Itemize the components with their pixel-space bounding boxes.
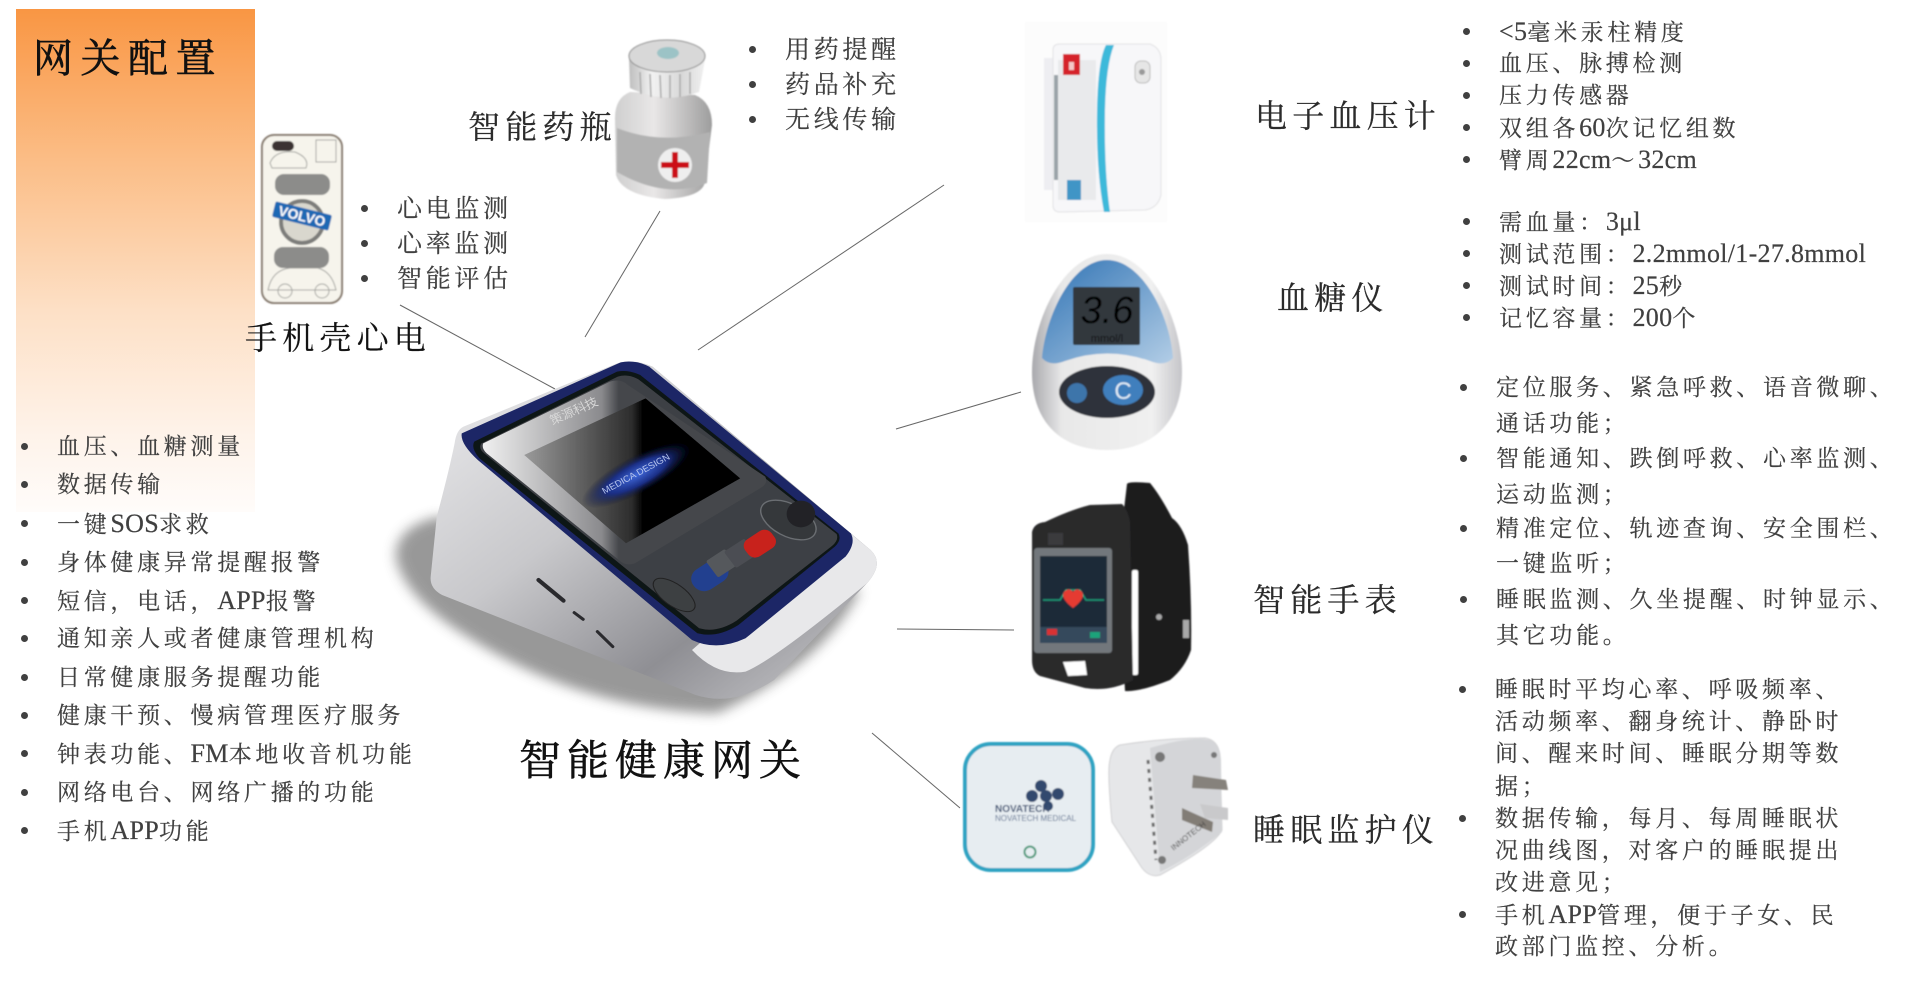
list: gateway configuration: 短信，电话，APP报警 <box>57 586 319 615</box>
list: smart watch features: 运动监测； <box>1496 482 1630 507</box>
heading: phone case ECG: 手机壳心电 <box>245 320 431 356</box>
icon: smart health gateway device: 策源科技 <box>547 394 600 427</box>
list: gateway configuration: 网络电台、网络广播的功能 <box>57 780 377 805</box>
list: sleep monitor features <box>1459 677 1842 959</box>
list: blood pressure specs: 臂周22cm～32cm <box>1499 145 1697 174</box>
list: blood pressure specs: 双组各60次记忆组数 <box>1499 113 1739 142</box>
list: sleep monitor features: 睡眠时平均心率、呼吸频率、 <box>1495 677 1842 702</box>
list: gateway configuration: 一键SOS求救 <box>57 509 212 538</box>
list: sleep monitor features: 活动频率、翻身统计、静卧时 <box>1495 709 1842 734</box>
icon: smart watch <box>1032 482 1191 691</box>
list: sleep monitor features: 数据传输，每月、每周睡眠状 <box>1495 806 1842 831</box>
list: smart watch features: 一键监听； <box>1496 551 1630 576</box>
list: pill bottle features: 药品补充 <box>785 72 900 99</box>
list: gateway configuration: 钟表功能、FM本地收音机功能 <box>57 739 416 768</box>
list: gateway configuration: 血压、血糖测量 <box>57 434 244 459</box>
list: gateway configuration: 日常健康服务提醒功能 <box>57 665 324 690</box>
icon: smart health gateway device: MEDICA DESIGN <box>600 452 672 496</box>
list: gateway configuration: 数据传输 <box>57 472 164 497</box>
icon: phone case ECG <box>262 135 342 303</box>
list: glucose meter specs: 测试范围：2.2mmol/1-27.8mmol <box>1499 239 1866 268</box>
list: sleep monitor features: 改进意见； <box>1495 870 1628 895</box>
icon: glucose meter: C <box>1114 378 1132 405</box>
icon: sleep monitor front <box>965 744 1093 870</box>
list: sleep monitor features: 况曲线图，对客户的睡眠提出 <box>1495 838 1842 863</box>
heading: glucose meter: 血糖仪 <box>1277 280 1389 316</box>
heading: sleep monitor: 睡眠监护仪 <box>1253 812 1439 848</box>
icon: sleep monitor front: NOVATECH <box>995 804 1050 815</box>
list: phone case features: 心率监测 <box>397 231 512 258</box>
list: smart watch features: 睡眠监测、久坐提醒、时钟显示、 <box>1496 587 1896 612</box>
list: glucose meter specs: 测试时间：25秒 <box>1499 271 1686 300</box>
list: sleep monitor features: 据； <box>1495 774 1548 799</box>
heading: blood pressure monitor: 电子血压计 <box>1255 98 1441 134</box>
list: smart watch features: 定位服务、紧急呼救、语音微聊、 <box>1496 375 1896 400</box>
list: blood pressure specs: 压力传感器 <box>1499 83 1632 108</box>
list: smart watch features: 其它功能。 <box>1496 623 1630 648</box>
list: blood pressure specs: 血压、脉搏检测 <box>1499 51 1686 76</box>
list: sleep monitor features: 手机APP管理，便于子女、民 <box>1495 900 1837 929</box>
icon: glucose meter <box>1032 254 1182 450</box>
heading: smart watch: 智能手表 <box>1253 582 1402 618</box>
list: sleep monitor features: 政部门监控、分析。 <box>1495 934 1735 959</box>
list: pill bottle features: 用药提醒 <box>785 37 900 64</box>
list: smart watch features: 智能通知、跌倒呼救、心率监测、 <box>1496 446 1896 471</box>
icon: glucose meter: mmol/l <box>1091 333 1123 345</box>
list: phone case features: 心电监测 <box>397 196 512 223</box>
list: gateway configuration: 身体健康异常提醒报警 <box>57 550 324 575</box>
icon: blood pressure monitor <box>1025 22 1167 222</box>
icon: smart pill bottle <box>615 40 712 199</box>
list: gateway configuration: 健康干预、慢病管理医疗服务 <box>57 703 404 728</box>
list: phone case features: 智能评估 <box>397 266 512 293</box>
heading: smart pill bottle: 智能药瓶 <box>468 109 617 145</box>
list: blood pressure specs <box>1463 17 1739 174</box>
icon: sleep monitor plug: INNOTECH <box>1169 819 1208 852</box>
list: gateway configuration: 手机APP功能 <box>57 816 212 845</box>
list: gateway configuration <box>21 434 416 845</box>
icon: smart health gateway device <box>396 361 877 713</box>
list: glucose meter specs <box>1463 207 1866 332</box>
icon: phone case ECG: VOLVO <box>277 202 327 230</box>
list: gateway configuration: 通知亲人或者健康管理机构 <box>57 626 377 651</box>
list: smart watch features: 精准定位、轨迹查询、安全围栏、 <box>1496 516 1896 541</box>
list: smart watch features <box>1460 375 1896 648</box>
title: 网关配置 <box>33 36 223 81</box>
list: pill bottle features: 无线传输 <box>785 107 900 134</box>
icon: glucose meter: 3.6 <box>1081 290 1134 332</box>
list: glucose meter specs: 记忆容量：200个 <box>1499 303 1699 332</box>
list: phone case features <box>361 196 512 293</box>
connector lines <box>400 185 1021 808</box>
panel: orange gradient header <box>16 9 255 512</box>
list: pill bottle features <box>749 36 900 134</box>
list: glucose meter specs: 需血量：3μl <box>1499 207 1641 236</box>
list: sleep monitor features: 间、醒来时间、睡眠分期等数 <box>1495 741 1842 766</box>
icon: sleep monitor plug <box>1109 738 1228 876</box>
list: blood pressure specs: <5毫米汞柱精度 <box>1499 17 1687 46</box>
heading: smart health gateway: 智能健康网关 <box>519 739 807 785</box>
icon: sleep monitor front: NOVATECH MEDICAL <box>995 814 1077 823</box>
list: smart watch features: 通话功能； <box>1496 411 1630 436</box>
